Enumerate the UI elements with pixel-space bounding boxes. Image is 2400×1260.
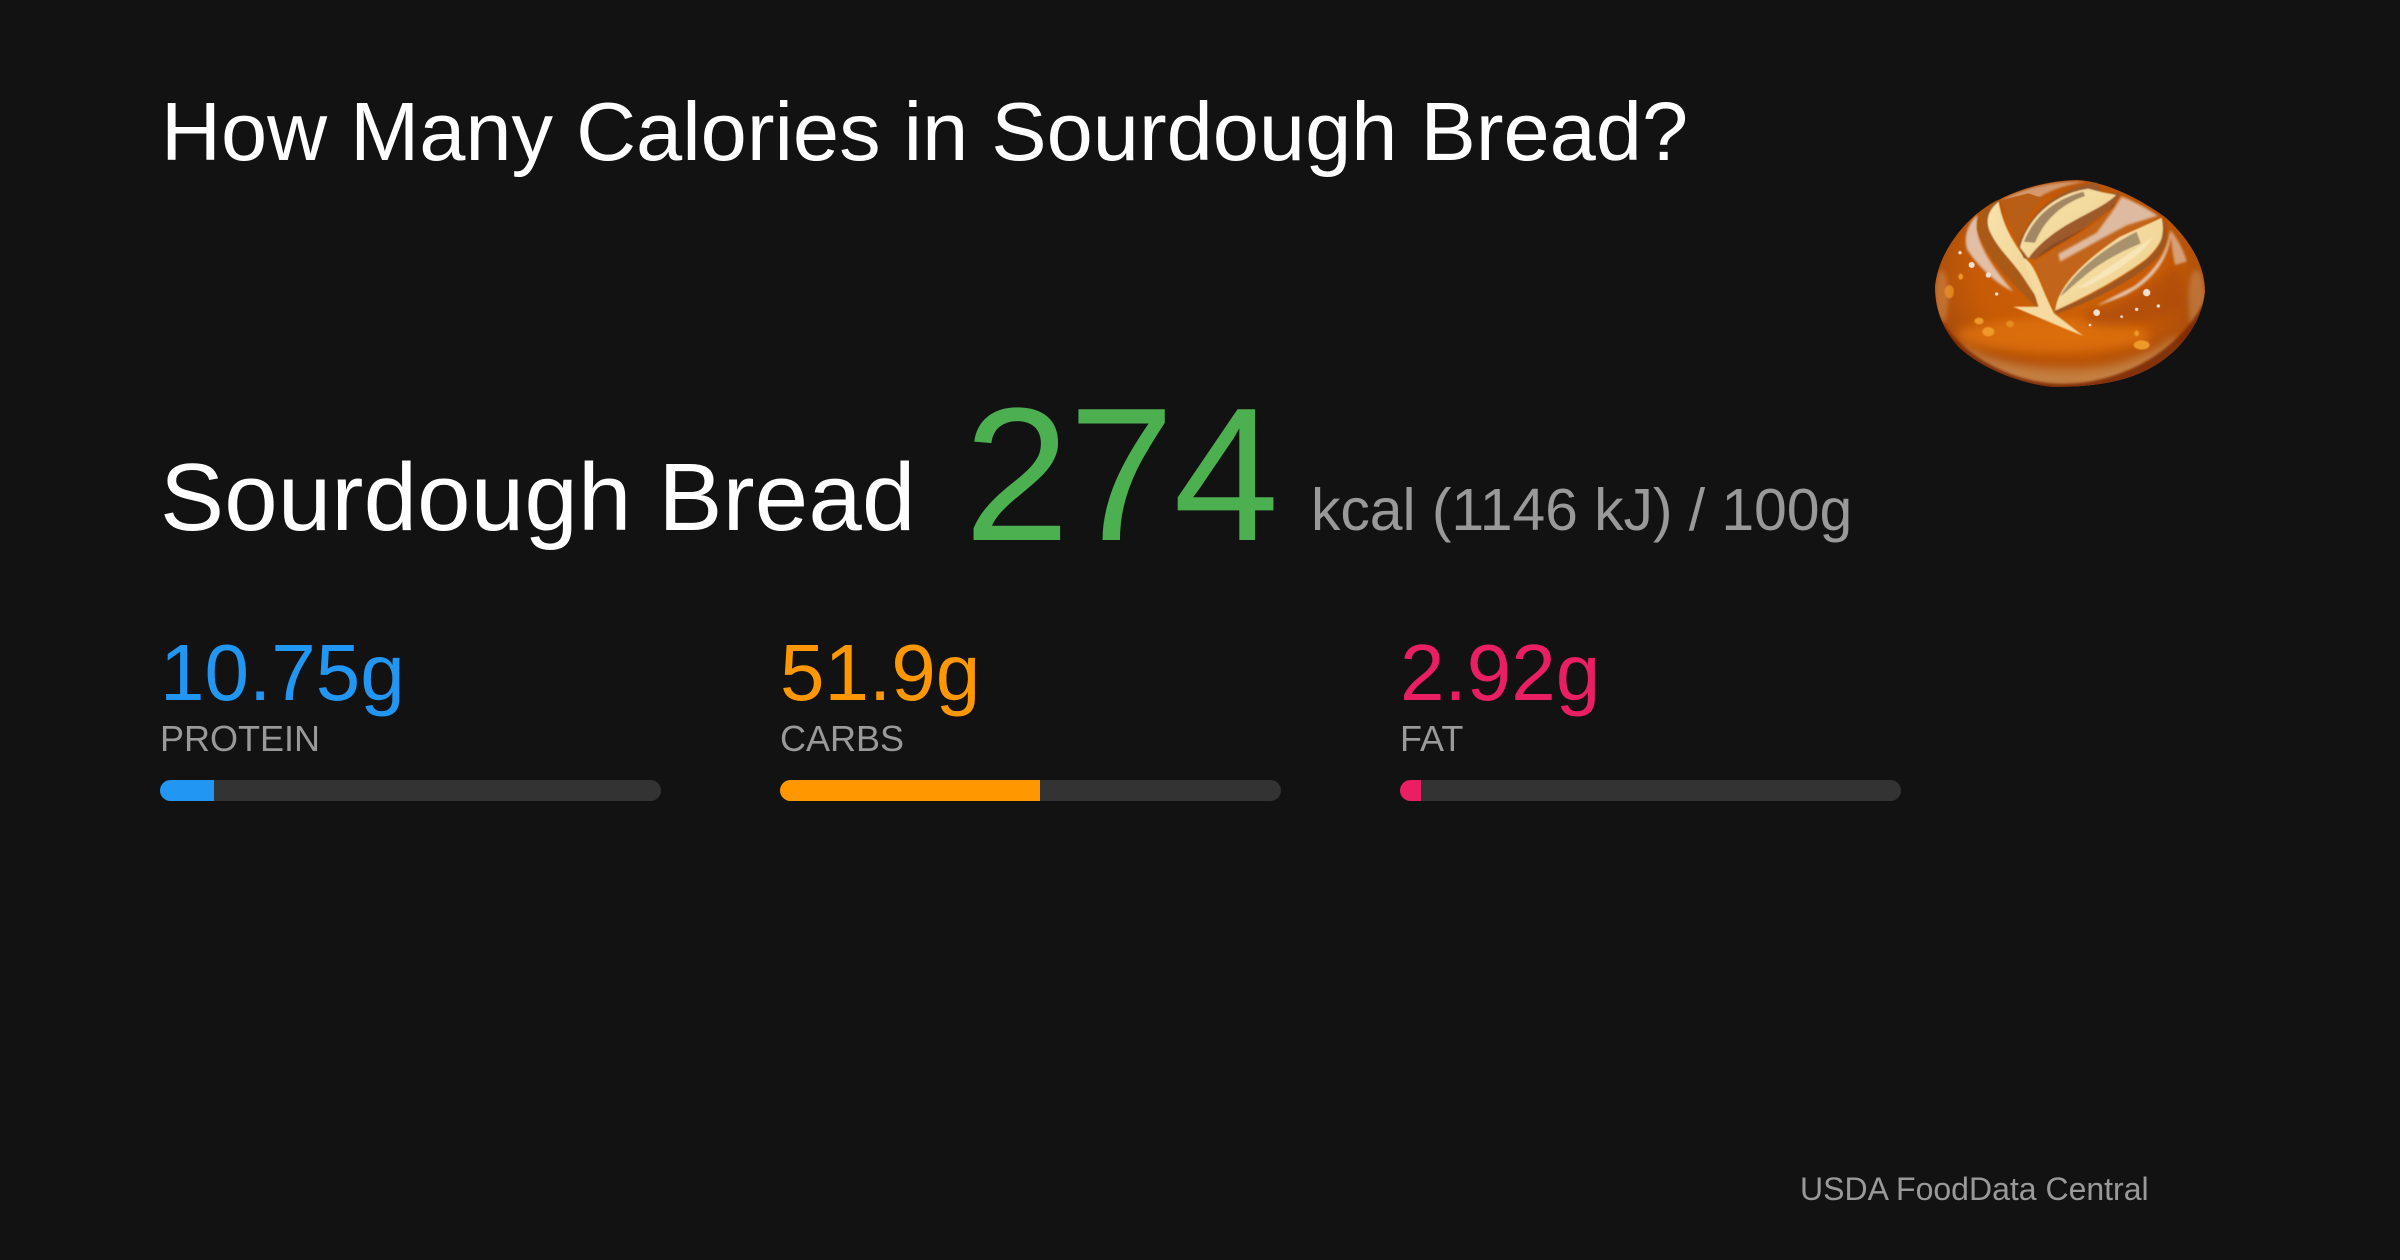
flour on middle band	[2058, 197, 2157, 262]
fat value: 2.92g	[1400, 628, 1600, 717]
protein label: PROTEIN	[160, 718, 320, 759]
central seam	[2013, 258, 2083, 336]
right score	[2055, 218, 2167, 314]
pale lower crust	[1950, 337, 2187, 390]
fat bar	[1400, 780, 1901, 801]
brown crust between scores	[2002, 193, 2043, 245]
protein bar	[160, 780, 661, 801]
right side mottling	[2188, 270, 2205, 330]
calorie value: 274	[964, 369, 1278, 581]
center score crumb	[2020, 189, 2116, 258]
left side mottling	[1935, 270, 1948, 323]
right score holes	[2060, 232, 2141, 297]
crust spots	[1945, 274, 2150, 350]
flour along loaf edge	[1966, 182, 2187, 306]
carbs bar	[780, 780, 1281, 801]
icon: sourdough bread loaf	[1930, 180, 2210, 397]
right score crumb	[2055, 218, 2164, 311]
fat label: FAT	[1400, 718, 1463, 759]
center score	[2018, 183, 2120, 259]
center score holes	[2024, 192, 2085, 243]
calorie unit: kcal (1146 kJ) / 100g	[1311, 477, 1852, 543]
left crust flap	[1977, 200, 2044, 313]
panel: protein	[160, 628, 661, 801]
carbs value: 51.9g	[780, 628, 980, 717]
source credit: USDA FoodData Central	[1800, 1171, 2149, 1207]
center lower lip	[2037, 193, 2119, 258]
carbs label: CARBS	[780, 718, 904, 759]
middle crust band	[2035, 195, 2161, 309]
right score highlight	[2077, 237, 2153, 288]
center score lip	[2018, 183, 2120, 259]
panel: fat	[1400, 628, 1901, 801]
title: How Many Calories in Sourdough Bread?	[161, 85, 1688, 178]
loaf body	[1935, 180, 2205, 387]
dark shoulders	[2087, 263, 2187, 326]
left score cream	[1988, 202, 2052, 314]
food name: Sourdough Bread	[160, 444, 916, 551]
left score	[1977, 200, 2052, 314]
crust shading	[1930, 263, 2210, 397]
right lower lip	[2055, 218, 2167, 314]
panel: carbs	[780, 628, 1281, 801]
bright belly	[1957, 318, 2150, 352]
protein value: 10.75g	[160, 628, 405, 717]
flour specks	[1958, 251, 2160, 326]
dark bottom edge	[1939, 301, 2203, 387]
